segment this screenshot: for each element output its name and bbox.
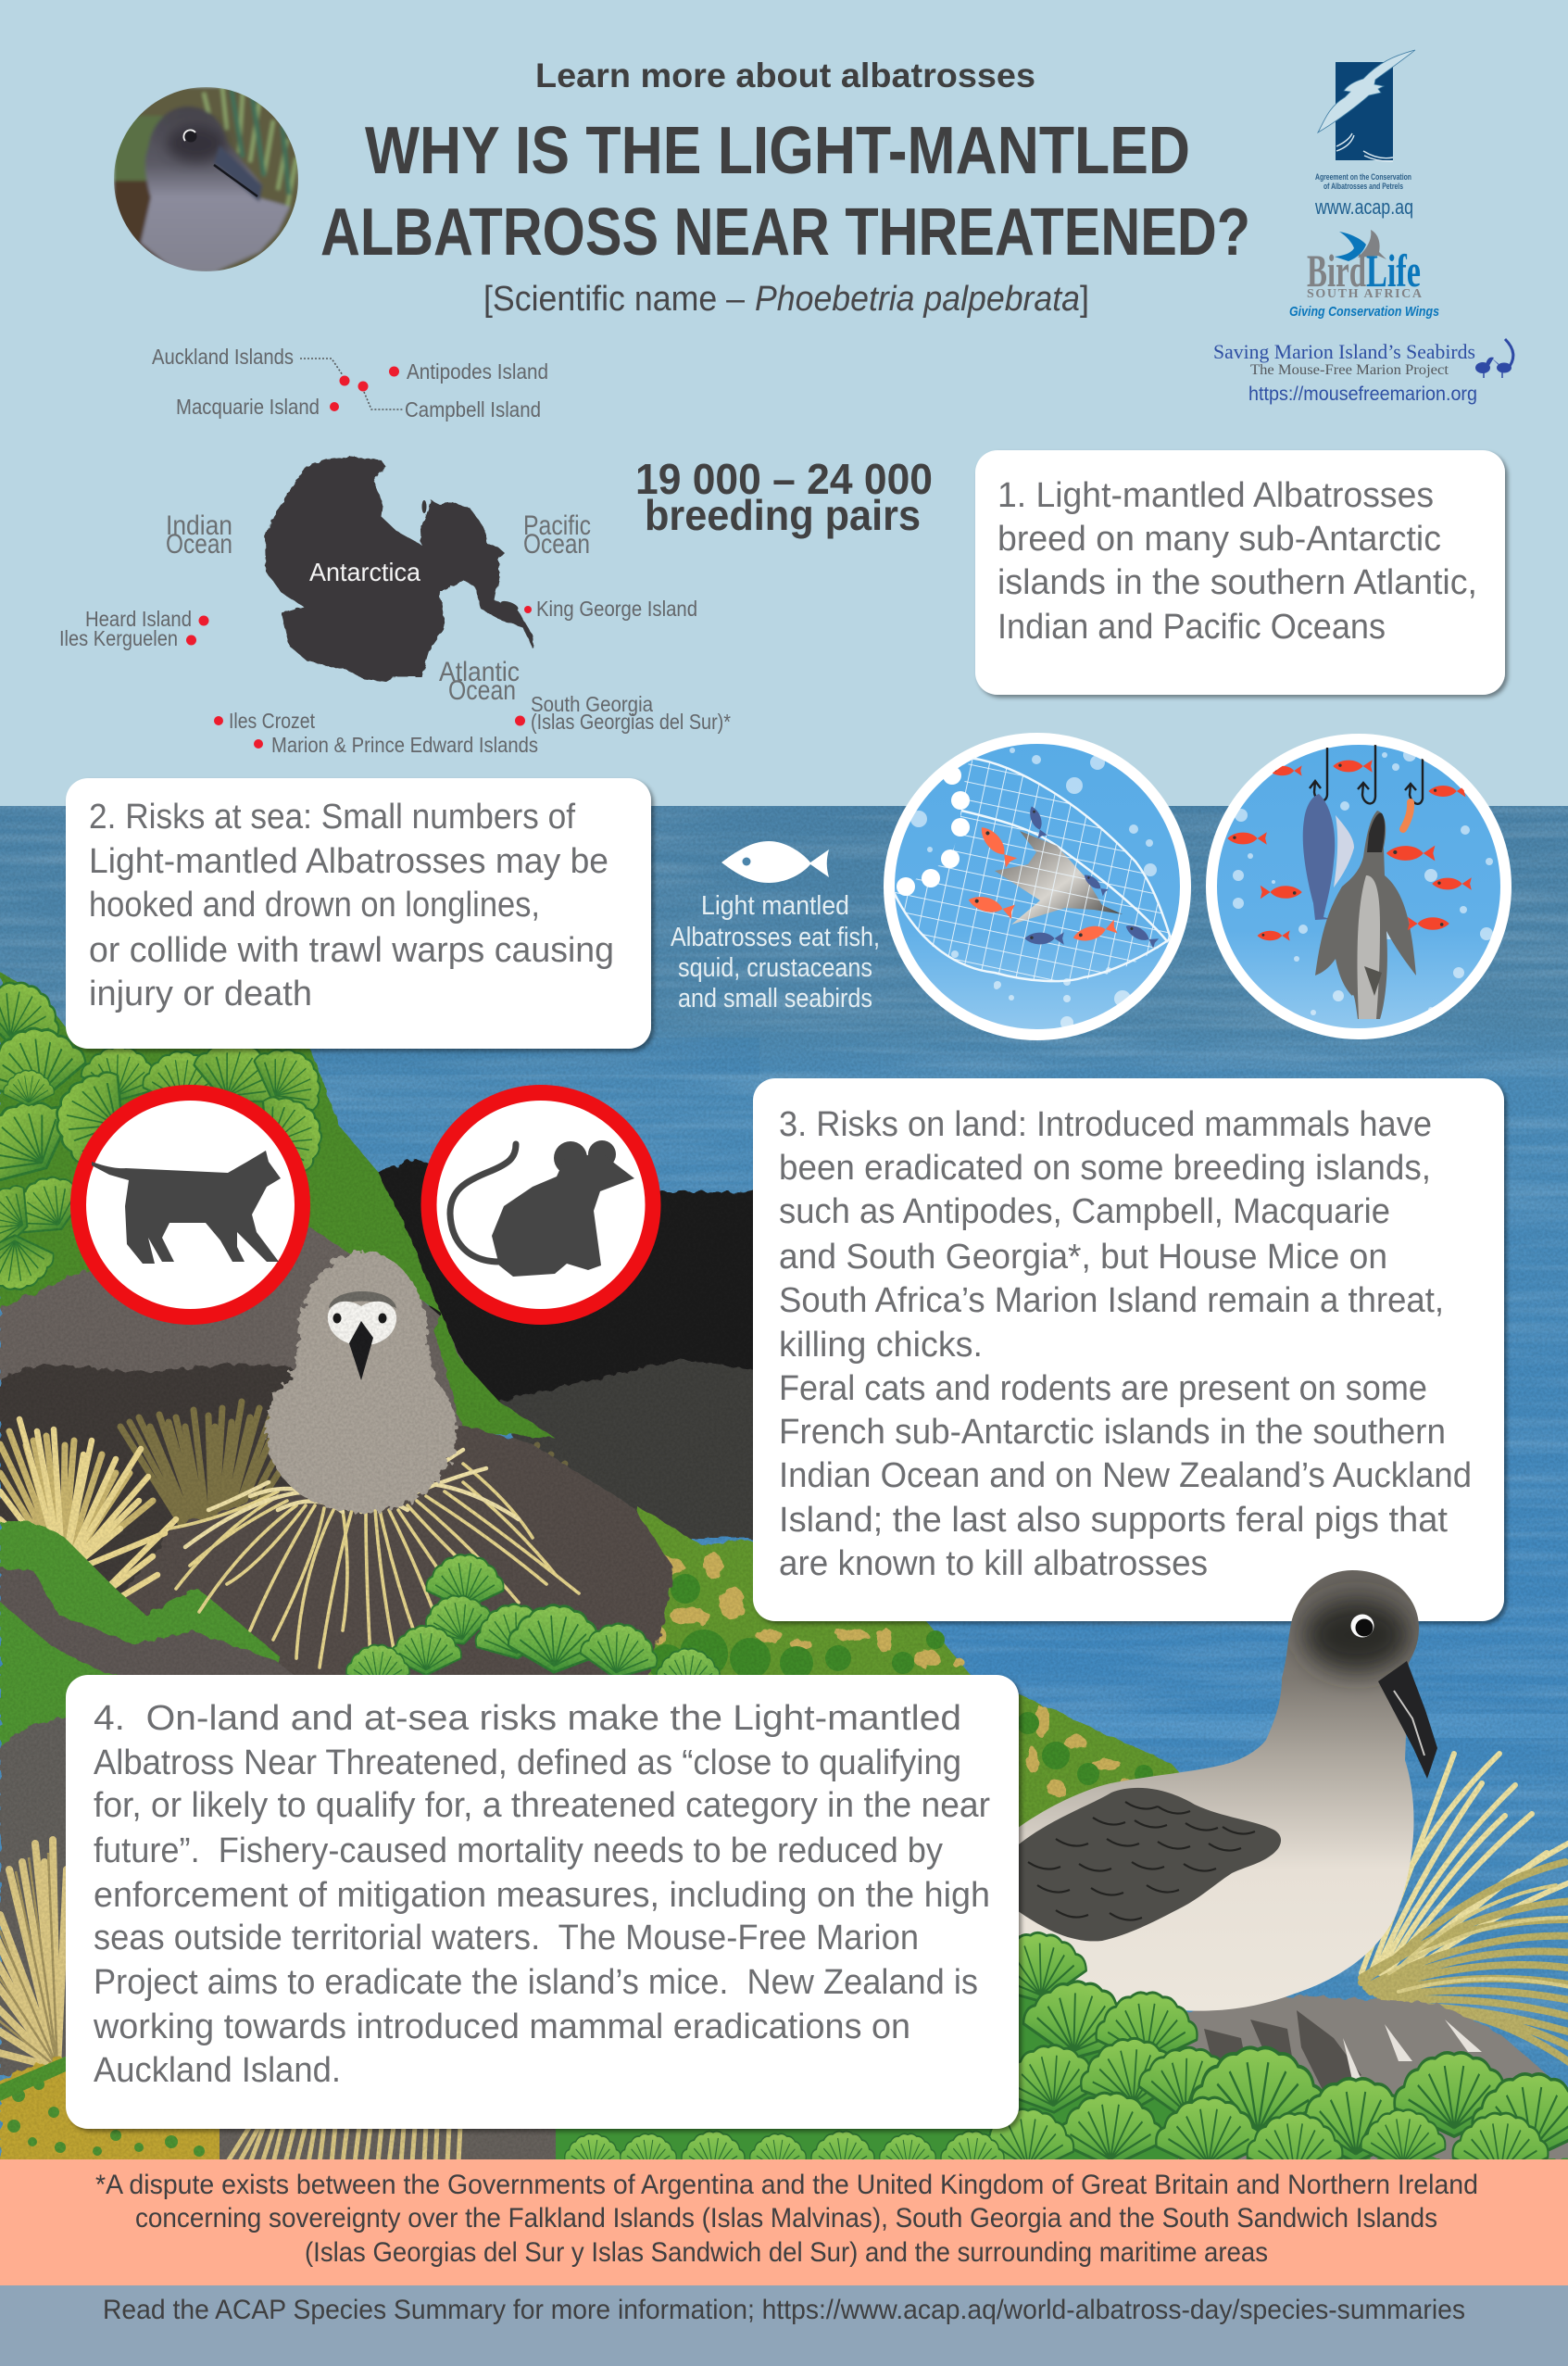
main title: ALBATROSS NEAR THREATENED? [320,195,1250,270]
left rock and tussock beside card 4 [0,1717,66,2077]
panel 2: risks at sea: hooked and drown on longlines, [89,886,540,925]
ocean labels: Ocean [448,675,516,706]
logo: BirdLife South Africa [1289,230,1439,320]
rock and grass below card 4 [220,2129,556,2159]
yellow moss bottom left [0,2056,220,2159]
panel 4: why near threatened: future”. Fishery-caused mortality needs to be reduced by [94,1831,943,1870]
sea [0,806,1568,2160]
icon: fish [721,841,829,883]
illustration: seabird caught in trawl net [889,738,1185,1035]
logo: Mouse-Free Marion: Saving Marion Island’s Seabirds [1213,340,1475,363]
map labels: South Georgia [531,692,653,716]
panel 2: risks at sea: 2. Risks at sea: Small numbers of [89,798,575,837]
green moss slope [0,973,555,1438]
panel 3: risks on land: Feral cats and rodents are present on some [779,1369,1427,1408]
panel 1: breeding: Indian and Pacific Oceans [997,608,1386,647]
panel 3: risks on land: French sub-Antarctic islands in the southern [779,1413,1446,1452]
fish in net [976,823,1017,868]
trapped bird [995,831,1123,925]
main title [320,114,1250,270]
panel 2: risks at sea [66,778,651,1049]
island dots [186,367,532,749]
panel 1: breeding: islands in the southern Atlantic, [997,563,1477,602]
nest rock [121,1423,673,1686]
logo: ACAP: Agreement on the Conservation [1315,172,1411,182]
map labels: Heard Island [85,607,192,631]
stat: breeding pairs: 19 000 – 24 000 [635,455,933,503]
logo: BirdLife South Africa: Giving Conservation Wings [1289,304,1439,320]
scientific name [483,280,1089,319]
scientific name: Phoebetria palpebrata [755,280,1080,319]
panel 4: why near threatened: enforcement of mitigation measures, including on the high [94,1876,990,1915]
map labels: Macquarie Island [176,395,320,419]
panel 4: why near threatened: seas outside territorial waters. The Mouse-Free Marion [94,1919,919,1957]
logo: ACAP [1314,50,1415,219]
fishing lines and hooks [1310,744,1423,804]
dark hills behind the island [378,1158,753,1540]
logo: ACAP: www.acap.aq [1314,195,1413,219]
drowned bird [1315,811,1416,1019]
panel 4: why near threatened: Project aims to eradicate the island’s mice. New Zealand is [94,1963,978,2002]
adult light-mantled albatross [1014,1570,1437,2011]
panel 4: why near threatened: working towards introduced mammal eradications on [93,2007,910,2046]
icon: no rodents sign [429,1093,653,1317]
ocean labels: Ocean [523,529,590,560]
eye [1350,1614,1374,1638]
panel 1: breeding: breed on many sub-Antarctic [997,520,1441,559]
hooked fish [1303,794,1335,920]
diet note with fish icon [671,841,880,1013]
panel 4: why near threatened: Auckland Island. [94,2051,341,2090]
panel 3: risks on land: and South Georgia*, but House Mice on [779,1238,1387,1277]
stat: breeding pairs: breeding pairs [645,491,921,539]
panel 3: risks on land: are known to kill albatrosses [779,1544,1208,1583]
footer band: more information [0,2285,1568,2366]
map labels: Marion & Prince Edward Islands [271,733,538,757]
Antarctica shape [265,457,533,682]
lower moss bands [0,1521,296,1760]
panel 4: why near threatened: for, or likely to qualify for, a threatened category in the near [94,1786,990,1825]
footer band: more information: Read the ACAP Species Summary for more information; https://www.acap.aq/world-albatross-day/species-summaries [103,2295,1465,2325]
rock behind chick [0,1223,472,1593]
icon: two seabirds [1475,339,1513,378]
foreground: ground and rock under adult albatross [556,1945,1568,2163]
logo: BirdLife South Africa: Life [1366,245,1421,296]
panel 4: why near threatened: Albatross Near Threatened, defined as “close to qualifying [94,1743,961,1782]
bird body and head [1014,1570,1419,2011]
panel 3: risks on land: Indian Ocean and on New Zealand’s Auckland [779,1456,1472,1495]
footnote band: sovereignty dispute [0,2159,1568,2285]
diet note with fish icon: squid, crustaceans [678,953,872,983]
logo: ACAP: of Albatrosses and Petrels [1323,182,1403,192]
illustration: seabird hooked on longline [1211,739,1506,1034]
olive grass clump [117,1399,569,1525]
dotted leader lines [300,359,403,409]
ocean labels: Pacific [523,510,591,541]
stat: breeding pairs [635,455,933,539]
ocean labels: Ocean [166,529,232,560]
footnote band: sovereignty dispute: (Islas Georgias del Sur y Islas Sandwich del Sur) and the surrounding maritime areas [305,2237,1268,2268]
map labels: Iles Kerguelen [59,626,178,650]
diet note with fish icon: and small seabirds [678,984,872,1013]
panel 3: risks on land: been eradicated on some breeding islands, [779,1149,1431,1188]
diet note with fish icon: Albatrosses eat fish, [671,923,880,952]
map labels: Auckland Islands [152,345,294,369]
plants around nest [346,1554,720,1693]
panel 3: risks on land: Island; the last also supports feral pigs that [779,1501,1448,1540]
panel 3: risks on land: such as Antipodes, Campbell, Macquarie [779,1192,1390,1231]
panel 1: breeding: 1. Light-mantled Albatrosses [997,476,1434,515]
ocean labels [166,510,591,706]
illustrated coastal scene [0,806,1568,2168]
logo: BirdLife South Africa: SOUTH AFRICA [1307,287,1423,301]
net floats [897,766,970,896]
ocean labels: Atlantic [439,657,520,687]
yellow-green moss hillside [637,1506,1180,1936]
header: learn more: Learn more about albatrosses [535,57,1035,94]
panel 3: risks on land: 3. Risks on land: Introduced mammals have [779,1105,1432,1144]
panel 2: risks at sea: Light-mantled Albatrosses may be [89,842,608,881]
panel 2: risks at sea: injury or death [89,975,312,1013]
panel 4: why near threatened [66,1675,1019,2129]
map labels: Iles Crozet [229,709,316,733]
red fish [1333,760,1373,773]
map labels: King George Island [536,597,697,621]
paper grain texture [0,806,1568,2160]
map: distribution of breeding islands [59,345,731,757]
bright tussock grass left [0,1419,176,1603]
net [894,758,1171,980]
map labels: Campbell Island [405,397,541,422]
photo: light-mantled albatross [114,87,299,272]
map: distribution of breeding islands: Antarctica [309,558,420,586]
footnote band: sovereignty dispute: *A dispute exists between the Governments of Argentina and the United Kingdom of Great Britain and Northern Ireland [95,2170,1478,2200]
tussock grass right [1361,1754,1568,2066]
icon: no cats sign [78,1093,302,1317]
footnote band: sovereignty dispute: concerning sovereignty over the Falkland Islands (Islas Malvinas), South Georgia and the South Sandwich Islands [135,2203,1437,2234]
scientific name: [Scientific name – [483,280,746,319]
panel 3: risks on land: South Africa’s Marion Island remain a threat, [779,1281,1444,1320]
chick [266,1251,457,1513]
sky background [0,0,1568,808]
map labels: Antipodes Island [407,359,548,384]
worm bait [1403,802,1411,829]
panel 2: risks at sea: or collide with trawl warps causing [89,931,614,970]
panel 3: risks on land: killing chicks. [779,1326,983,1365]
panel 4: why near threatened: 4. On-land and at-sea risks make the Light-mantled [94,1699,961,1738]
panel 1: breeding [975,450,1505,695]
logo: Mouse-Free Marion: https://mousefreemarion.org [1248,384,1477,405]
panel 3: risks on land [753,1078,1504,1621]
plants bottom right [565,1925,1568,2180]
logo: BirdLife South Africa: Bird [1307,245,1366,296]
wing with scalloped feathers [1014,1788,1281,1941]
logo: Mouse-Free Marion [1213,339,1513,405]
diet note with fish icon: Light mantled [701,891,849,921]
ocean labels: Indian [166,510,232,541]
map labels: (Islas Georgias del Sur)* [531,710,731,734]
map labels [59,345,731,757]
logo: Mouse-Free Marion: The Mouse-Free Marion Project [1250,362,1449,378]
scalloped plants upper left [0,970,336,1290]
scientific name: ] [1080,280,1089,319]
chick nest straw [169,1450,579,1668]
beak [1378,1661,1437,1779]
main title: WHY IS THE LIGHT-MANTLED [365,114,1190,188]
